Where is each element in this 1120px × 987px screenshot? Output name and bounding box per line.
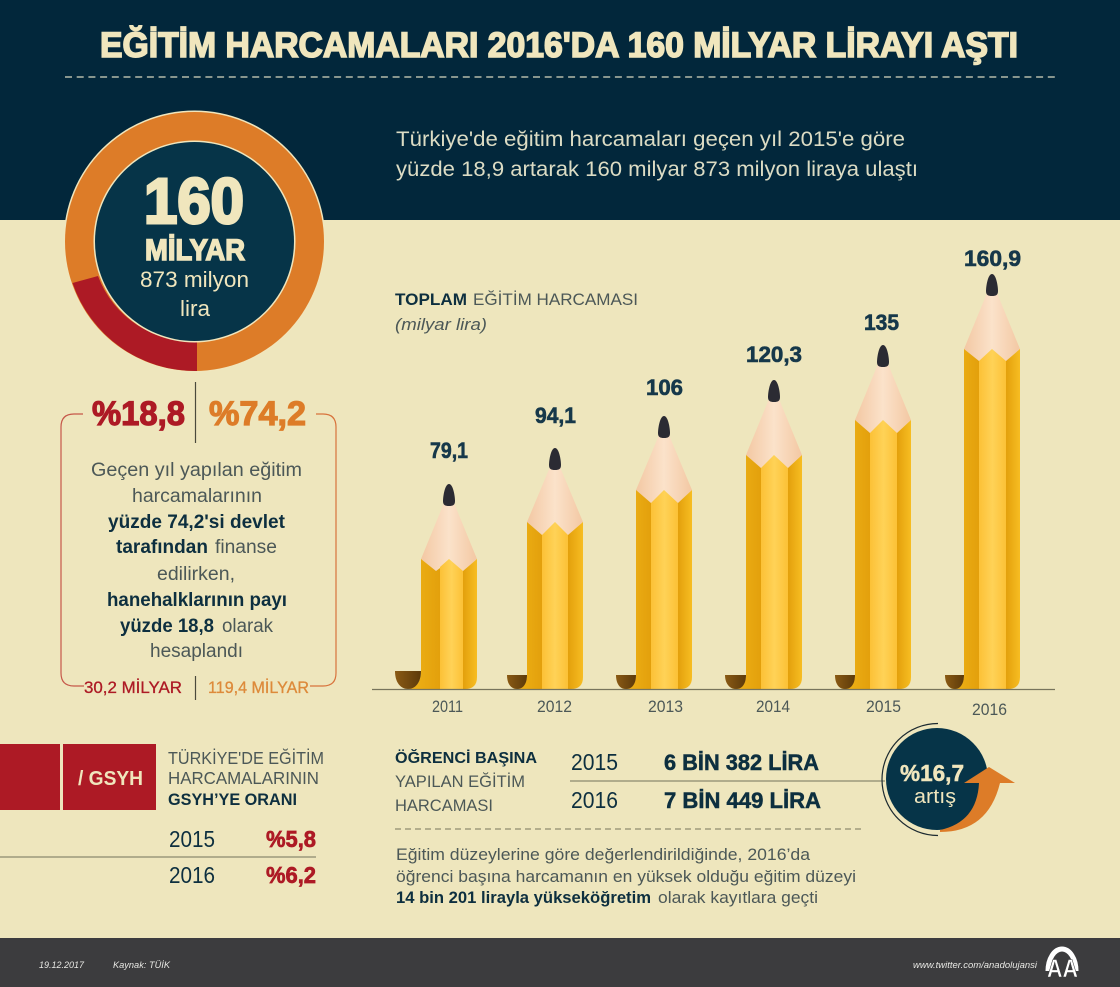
chart heading: EĞİTİM HARCAMASI	[473, 290, 638, 309]
share percentages: %74,2	[209, 395, 306, 433]
footer credits	[39, 960, 1038, 970]
year labels: 2011	[432, 697, 463, 716]
year labels: 2015	[866, 697, 901, 716]
per-student table: 7 BİN 449 LİRA	[664, 788, 821, 813]
education level note	[396, 846, 856, 907]
pencil bar chart	[372, 246, 1055, 719]
GSYH heading: HARCAMALARININ	[168, 768, 319, 788]
footer credits: 19.12.2017	[39, 960, 85, 970]
funding description	[91, 460, 302, 662]
year labels: 2016	[972, 700, 1007, 719]
intro text: yüzde 18,9 artarak 160 milyar 873 milyon liraya ulaştı	[396, 158, 918, 181]
icon: agency logo: AA	[1047, 955, 1078, 983]
funding description: tarafından	[116, 537, 208, 558]
icon: rising arrow	[940, 767, 1015, 832]
amounts	[84, 676, 309, 700]
amounts: 119,4 MİLYAR	[208, 678, 309, 697]
GSYH heading: TÜRKİYE'DE EĞİTİM	[168, 747, 324, 768]
amounts: 30,2 MİLYAR	[84, 678, 182, 697]
per-student heading: ÖĞRENCİ BAŞINA	[395, 748, 537, 767]
per-student heading: YAPILAN EĞİTİM	[395, 772, 525, 791]
year labels: 2013	[648, 697, 683, 716]
GSYH table	[0, 826, 316, 888]
pencil 2016	[945, 274, 1020, 689]
GSYH badge: / GSYH	[78, 768, 143, 790]
education level note: öğrenci başına harcamanın en yüksek olduğu eğitim düzeyi	[396, 868, 856, 886]
pencil 2013	[616, 416, 692, 689]
pencil value labels: 135	[864, 310, 899, 335]
donut value text: 160	[144, 165, 244, 237]
GSYH table: %5,8	[266, 826, 316, 852]
education level note: Eğitim düzeylerine göre değerlendirildiğinde, 2016’da	[396, 846, 811, 864]
title: EĞİTİM HARCAMALARI 2016'DA 160 MİLYAR LİRAYI AŞTI	[100, 25, 1018, 65]
year labels: 2014	[756, 697, 790, 716]
GSYH heading	[168, 747, 324, 809]
donut value text: MİLYAR	[145, 234, 245, 267]
funding description: hanehalklarının payı	[107, 590, 287, 611]
year labels	[432, 697, 1007, 719]
increase badge: artış	[914, 786, 956, 808]
intro text: Türkiye'de eğitim harcamaları geçen yıl 2015'e göre	[396, 128, 905, 151]
funding description: finanse	[215, 537, 277, 558]
share percentages	[92, 382, 306, 443]
pencil value labels: 94,1	[535, 403, 576, 428]
funding description: yüzde 74,2'si devlet	[108, 512, 286, 533]
funding description: yüzde 18,8	[120, 616, 214, 637]
pencil value labels: 106	[646, 375, 683, 400]
GSYH badge	[0, 744, 156, 810]
increase badge: %16,7	[900, 760, 964, 786]
funding description: harcamalarının	[132, 486, 262, 507]
donut chart: 160 milyar	[64, 110, 326, 372]
per-student table: 2016	[571, 787, 618, 813]
pencil 2012	[507, 448, 583, 689]
per-student table: 6 BİN 382 LİRA	[664, 750, 819, 775]
per-student table: 2015	[571, 749, 618, 775]
footer credits: Kaynak: TÜİK	[113, 960, 171, 970]
header band	[0, 0, 1120, 220]
pencil 2014	[725, 380, 802, 689]
chart heading: (milyar lira)	[395, 315, 487, 334]
funding description: olarak	[222, 616, 273, 637]
intro text	[396, 128, 918, 181]
donut value text	[140, 165, 249, 321]
chart heading	[395, 290, 638, 334]
pencil value labels: 160,9	[964, 246, 1021, 271]
donut value text: 873 milyon	[140, 267, 249, 292]
chart heading: TOPLAM	[395, 290, 467, 309]
per-student table	[570, 749, 885, 813]
per-student heading: HARCAMASI	[395, 796, 493, 815]
pencil value labels	[430, 246, 1021, 463]
education level note: 14 bin 201 lirayla yükseköğretim	[396, 889, 651, 907]
increase badge	[882, 724, 1015, 836]
year labels: 2012	[537, 697, 572, 716]
per-student heading	[395, 748, 537, 815]
footer	[0, 938, 1120, 987]
funding description: Geçen yıl yapılan eğitim	[91, 460, 302, 481]
funding description: edilirken,	[157, 564, 235, 585]
GSYH table: 2016	[169, 862, 215, 888]
share percentages: %18,8	[92, 395, 185, 433]
funding description: hesaplandı	[150, 641, 243, 662]
pencil 2015	[835, 345, 911, 689]
GSYH heading: GSYH’YE ORANI	[168, 790, 297, 809]
GSYH table: 2015	[169, 826, 215, 852]
education level note: olarak kayıtlara geçti	[658, 889, 818, 907]
footer credits: www.twitter.com/anadolujansi	[913, 960, 1038, 970]
pencil value labels: 120,3	[746, 342, 802, 367]
pencil 2011	[395, 484, 477, 689]
pencil value labels: 79,1	[430, 438, 468, 463]
bracket frame	[61, 414, 336, 686]
GSYH table: %6,2	[266, 862, 316, 888]
donut value text: lira	[180, 296, 211, 321]
